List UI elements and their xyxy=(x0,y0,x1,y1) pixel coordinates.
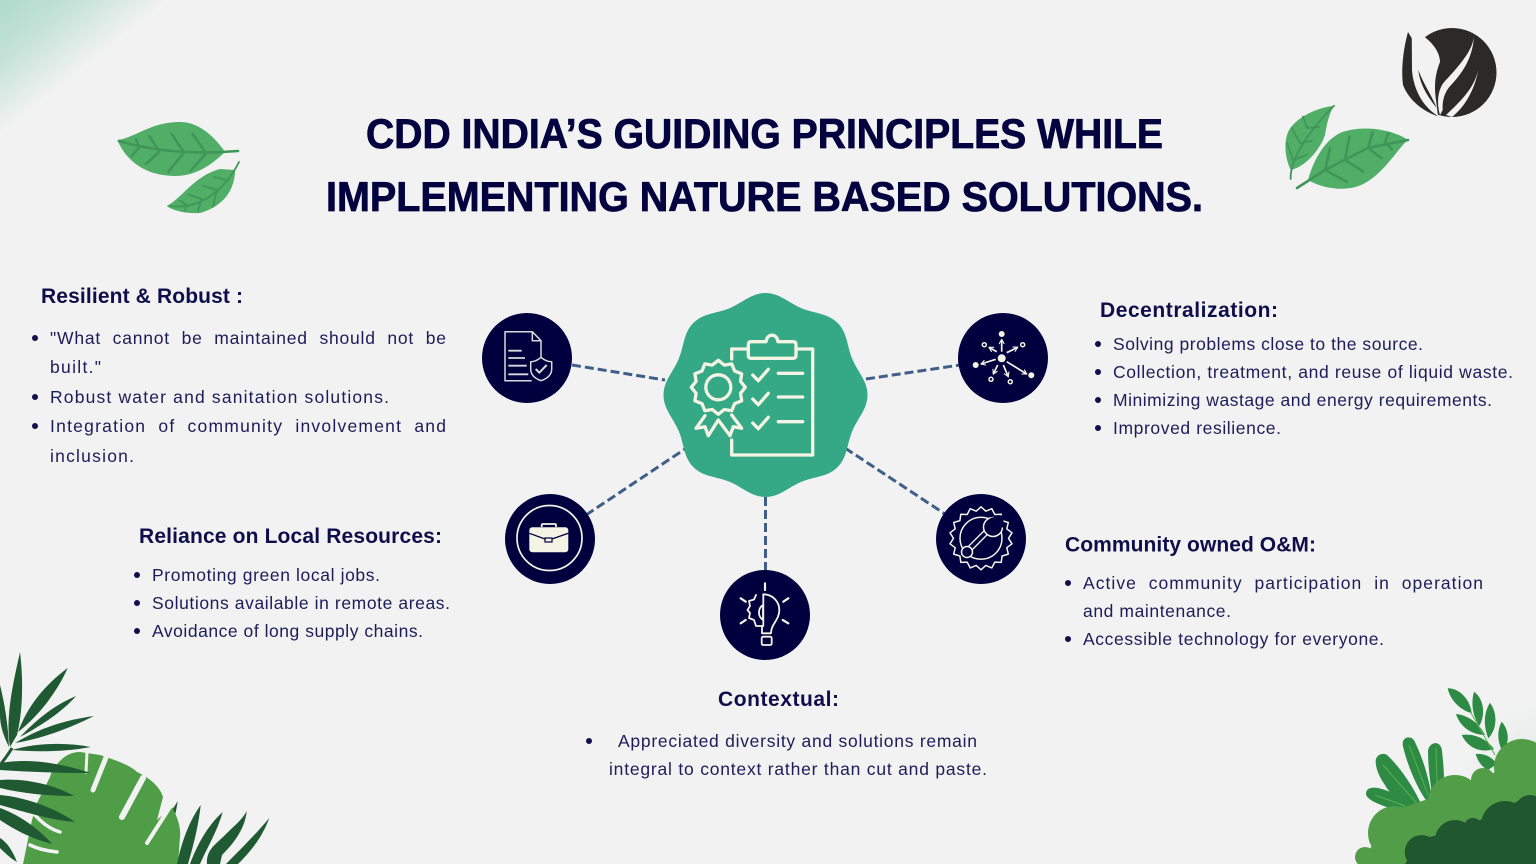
text block: Reliance on Local Resources xyxy=(134,525,450,641)
heading: Reliance on Local Resources: Reliance on Local Resources: xyxy=(139,525,442,548)
connector lines xyxy=(572,365,960,572)
illustration: bottom-left foliage xyxy=(0,652,269,864)
icon: decentralised network arrows xyxy=(958,313,1048,403)
bullet list: Decentralization xyxy=(1095,334,1513,438)
icon: left green leaves xyxy=(117,122,239,213)
bullet list: Reliance on Local Resources: Solutions available in remote areas. xyxy=(152,593,450,613)
heading: Decentralization: Decentralization: xyxy=(1100,299,1278,322)
bullet list: Community owned O&M: Accessible technology for everyone. xyxy=(1083,629,1384,649)
bullet list: Reliance on Local Resources xyxy=(134,565,450,641)
bullet list: Community owned O&M xyxy=(1065,573,1483,649)
icon: lightbulb with gear xyxy=(720,570,810,660)
bullet list: Resilient & Robust xyxy=(32,328,446,466)
title: CDD INDIA’S GUIDING PRINCIPLES WHILE xyxy=(366,110,1163,157)
icon: right green leaves xyxy=(1285,106,1408,189)
bullet list: Community owned O&M: and maintenance. xyxy=(1083,601,1231,621)
icon: organisation logo xyxy=(1402,28,1496,117)
bullet list: Contextual xyxy=(586,731,987,779)
bullet list: Resilient & Robust: Integration of community involvement and xyxy=(50,416,446,436)
bullet list: Decentralization: Solving problems close to the source. xyxy=(1113,334,1423,354)
bullet list: Contextual: Appreciated diversity and solutions remain xyxy=(618,731,977,751)
bullet list: Contextual: integral to context rather than cut and paste. xyxy=(609,759,987,779)
heading: Community owned O&M: Community owned O&M: xyxy=(1065,534,1316,556)
title xyxy=(326,110,1203,220)
heading: Resilient & Robust: Resilient & Robust : xyxy=(41,285,243,308)
bullet list: Reliance on Local Resources: Promoting green local jobs. xyxy=(152,565,380,585)
text block: Decentralization xyxy=(1095,299,1513,438)
central badge xyxy=(664,293,868,497)
bullet list: Community owned O&M: Active community participation in operation xyxy=(1083,573,1483,593)
bullet list: Reliance on Local Resources: Avoidance of long supply chains. xyxy=(152,621,423,641)
text block: Contextual xyxy=(586,688,987,779)
icon: document with shield xyxy=(482,313,572,403)
bullet list: Resilient & Robust: built." xyxy=(50,357,101,377)
title: IMPLEMENTING NATURE BASED SOLUTIONS. xyxy=(326,173,1203,220)
bullet list: Decentralization: Collection, treatment, and reuse of liquid waste. xyxy=(1113,362,1513,382)
bullet list: Resilient & Robust: inclusion. xyxy=(50,446,134,466)
bullet list: Resilient & Robust: "What cannot be maintained should not be xyxy=(50,328,446,348)
heading: Contextual: Contextual: xyxy=(718,688,839,711)
icon: briefcase xyxy=(505,494,595,584)
bullet list: Decentralization: Minimizing wastage and energy requirements. xyxy=(1113,390,1492,410)
icon: gear with wrench xyxy=(936,494,1026,584)
bullet list: Decentralization: Improved resilience. xyxy=(1113,418,1281,438)
bullet list: Resilient & Robust: Robust water and sanitation solutions. xyxy=(50,387,389,407)
icon: clipboard with rosette xyxy=(691,335,813,455)
text block: Community owned O&M xyxy=(1065,534,1483,649)
text block: Resilient & Robust xyxy=(32,285,446,466)
illustration: bottom-right foliage xyxy=(1355,688,1536,864)
